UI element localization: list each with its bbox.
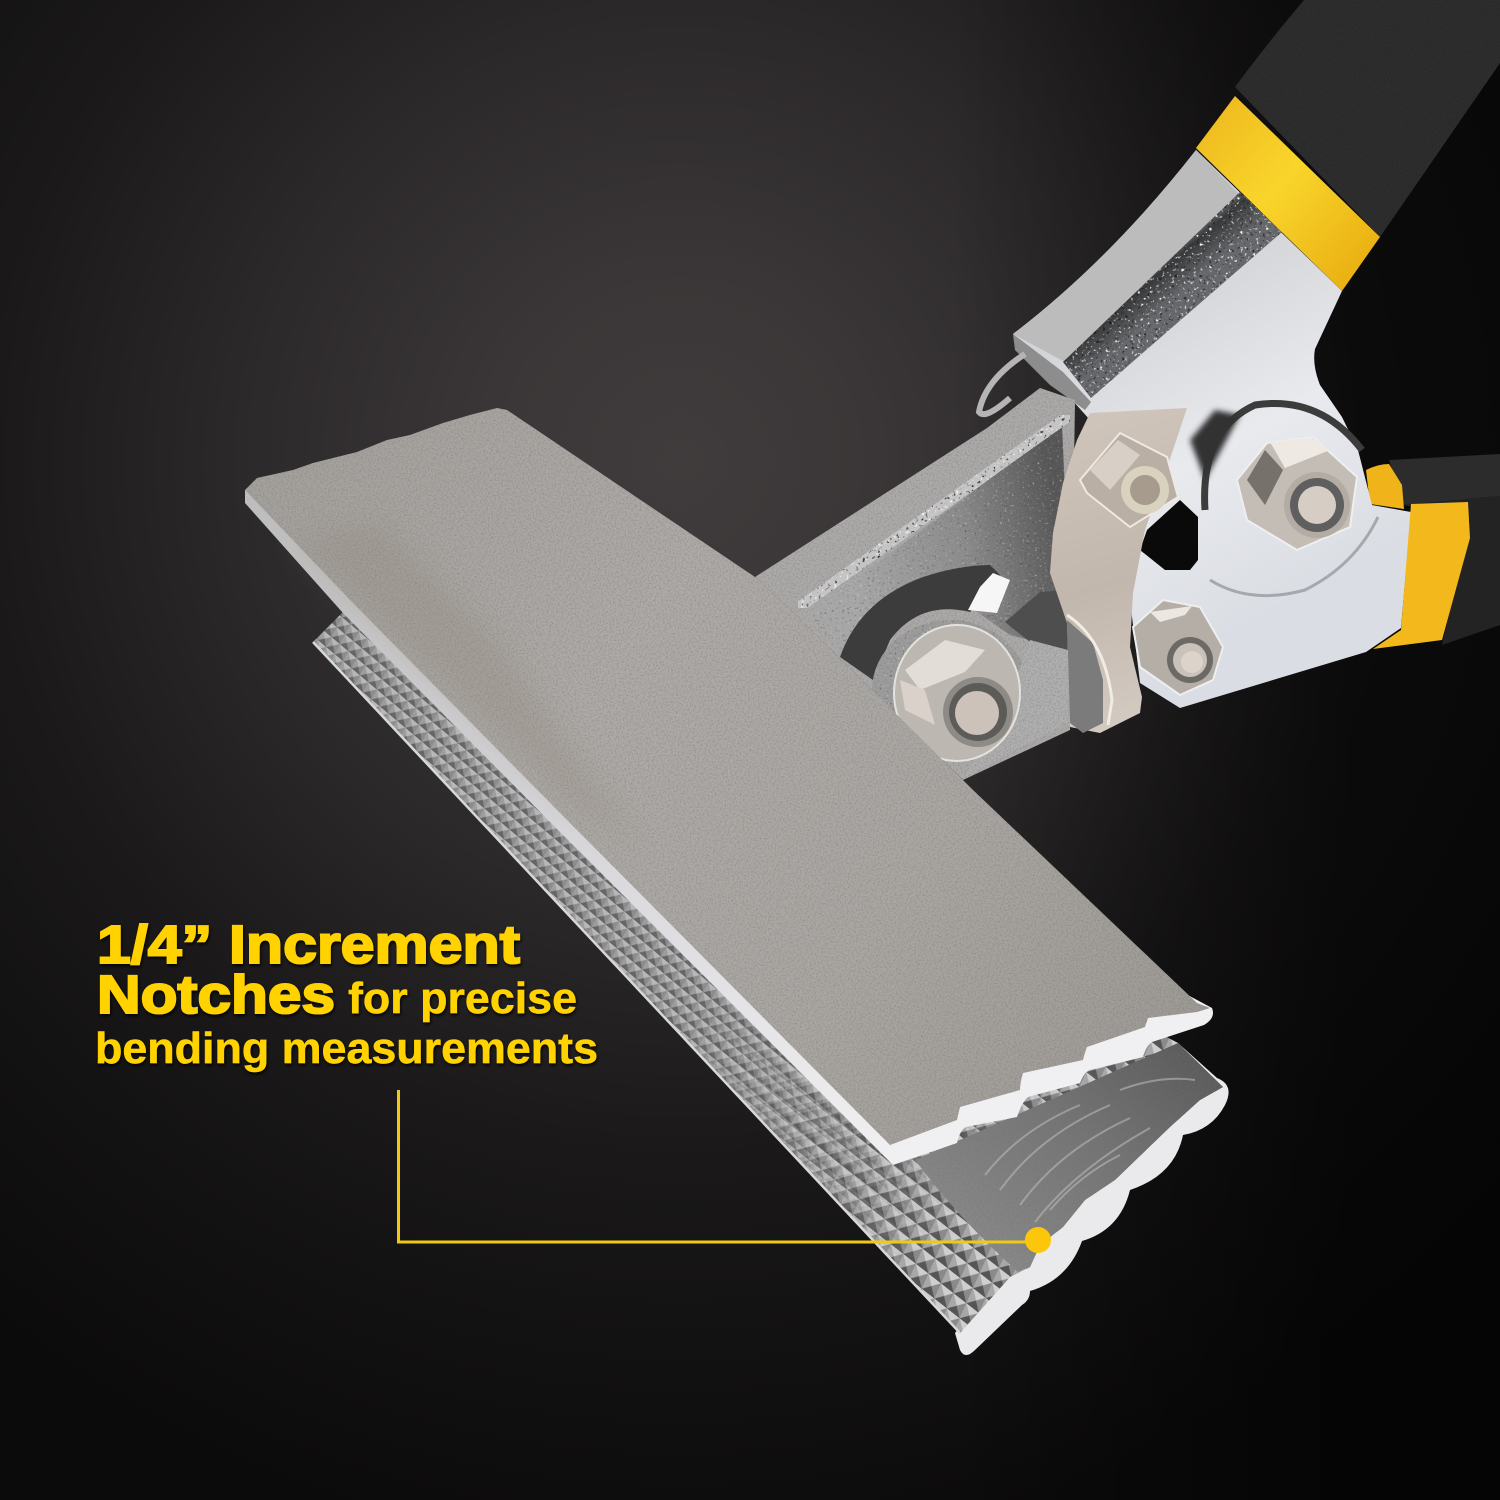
yellow collars (1196, 96, 1470, 649)
heading line two: Notches (97, 965, 335, 1025)
nut top left (1080, 433, 1178, 527)
upper blade edge thickness (245, 490, 1213, 1165)
nuts and bolts (894, 433, 1357, 761)
lower blade knurled surface (313, 610, 1223, 1333)
bright reflection (968, 573, 1010, 613)
dark crescent opening (840, 565, 1000, 680)
chrome shadow arcs (1205, 403, 1362, 510)
lower blade highlight edge (313, 642, 960, 1333)
upper blade top surface (245, 408, 1210, 1145)
nut lower right (1133, 600, 1223, 695)
tool: hand seamer (245, 0, 1500, 1355)
description part one: for precise (348, 974, 577, 1023)
lower jaw stem (755, 388, 1075, 780)
spring loop (979, 354, 1025, 414)
lower blade coarse knurl near tip (694, 1014, 1223, 1333)
upper handle grip (1235, 0, 1500, 237)
heading callout text (95, 915, 598, 1073)
lower blade (313, 610, 1229, 1355)
boss around nut (872, 620, 1028, 760)
blade stain (290, 520, 640, 850)
dark recess (1005, 590, 1068, 655)
description part two: bending measurements (95, 1024, 598, 1073)
lower blade polished tip (915, 1043, 1223, 1272)
upper arm chrome (1013, 150, 1411, 708)
stem flange (755, 388, 1075, 780)
heading line one: 1/4” Increment (97, 915, 520, 975)
dark gap between linkage (1140, 500, 1198, 570)
lower plate (963, 640, 1068, 778)
nut top right (1237, 437, 1357, 550)
callout leader line (398, 1090, 1038, 1242)
lower blade scalloped edge (955, 1043, 1229, 1355)
lower handle grips (1366, 454, 1500, 645)
upper blade (245, 408, 1213, 1165)
nut lower left (894, 625, 1020, 761)
linkage plate (1050, 408, 1187, 733)
callout dot (1025, 1227, 1051, 1253)
stem embossed body (808, 425, 1072, 655)
linkage dark cut-out (1067, 620, 1103, 733)
stem ridge highlight (798, 415, 1070, 608)
polishing arcs (985, 1079, 1195, 1222)
